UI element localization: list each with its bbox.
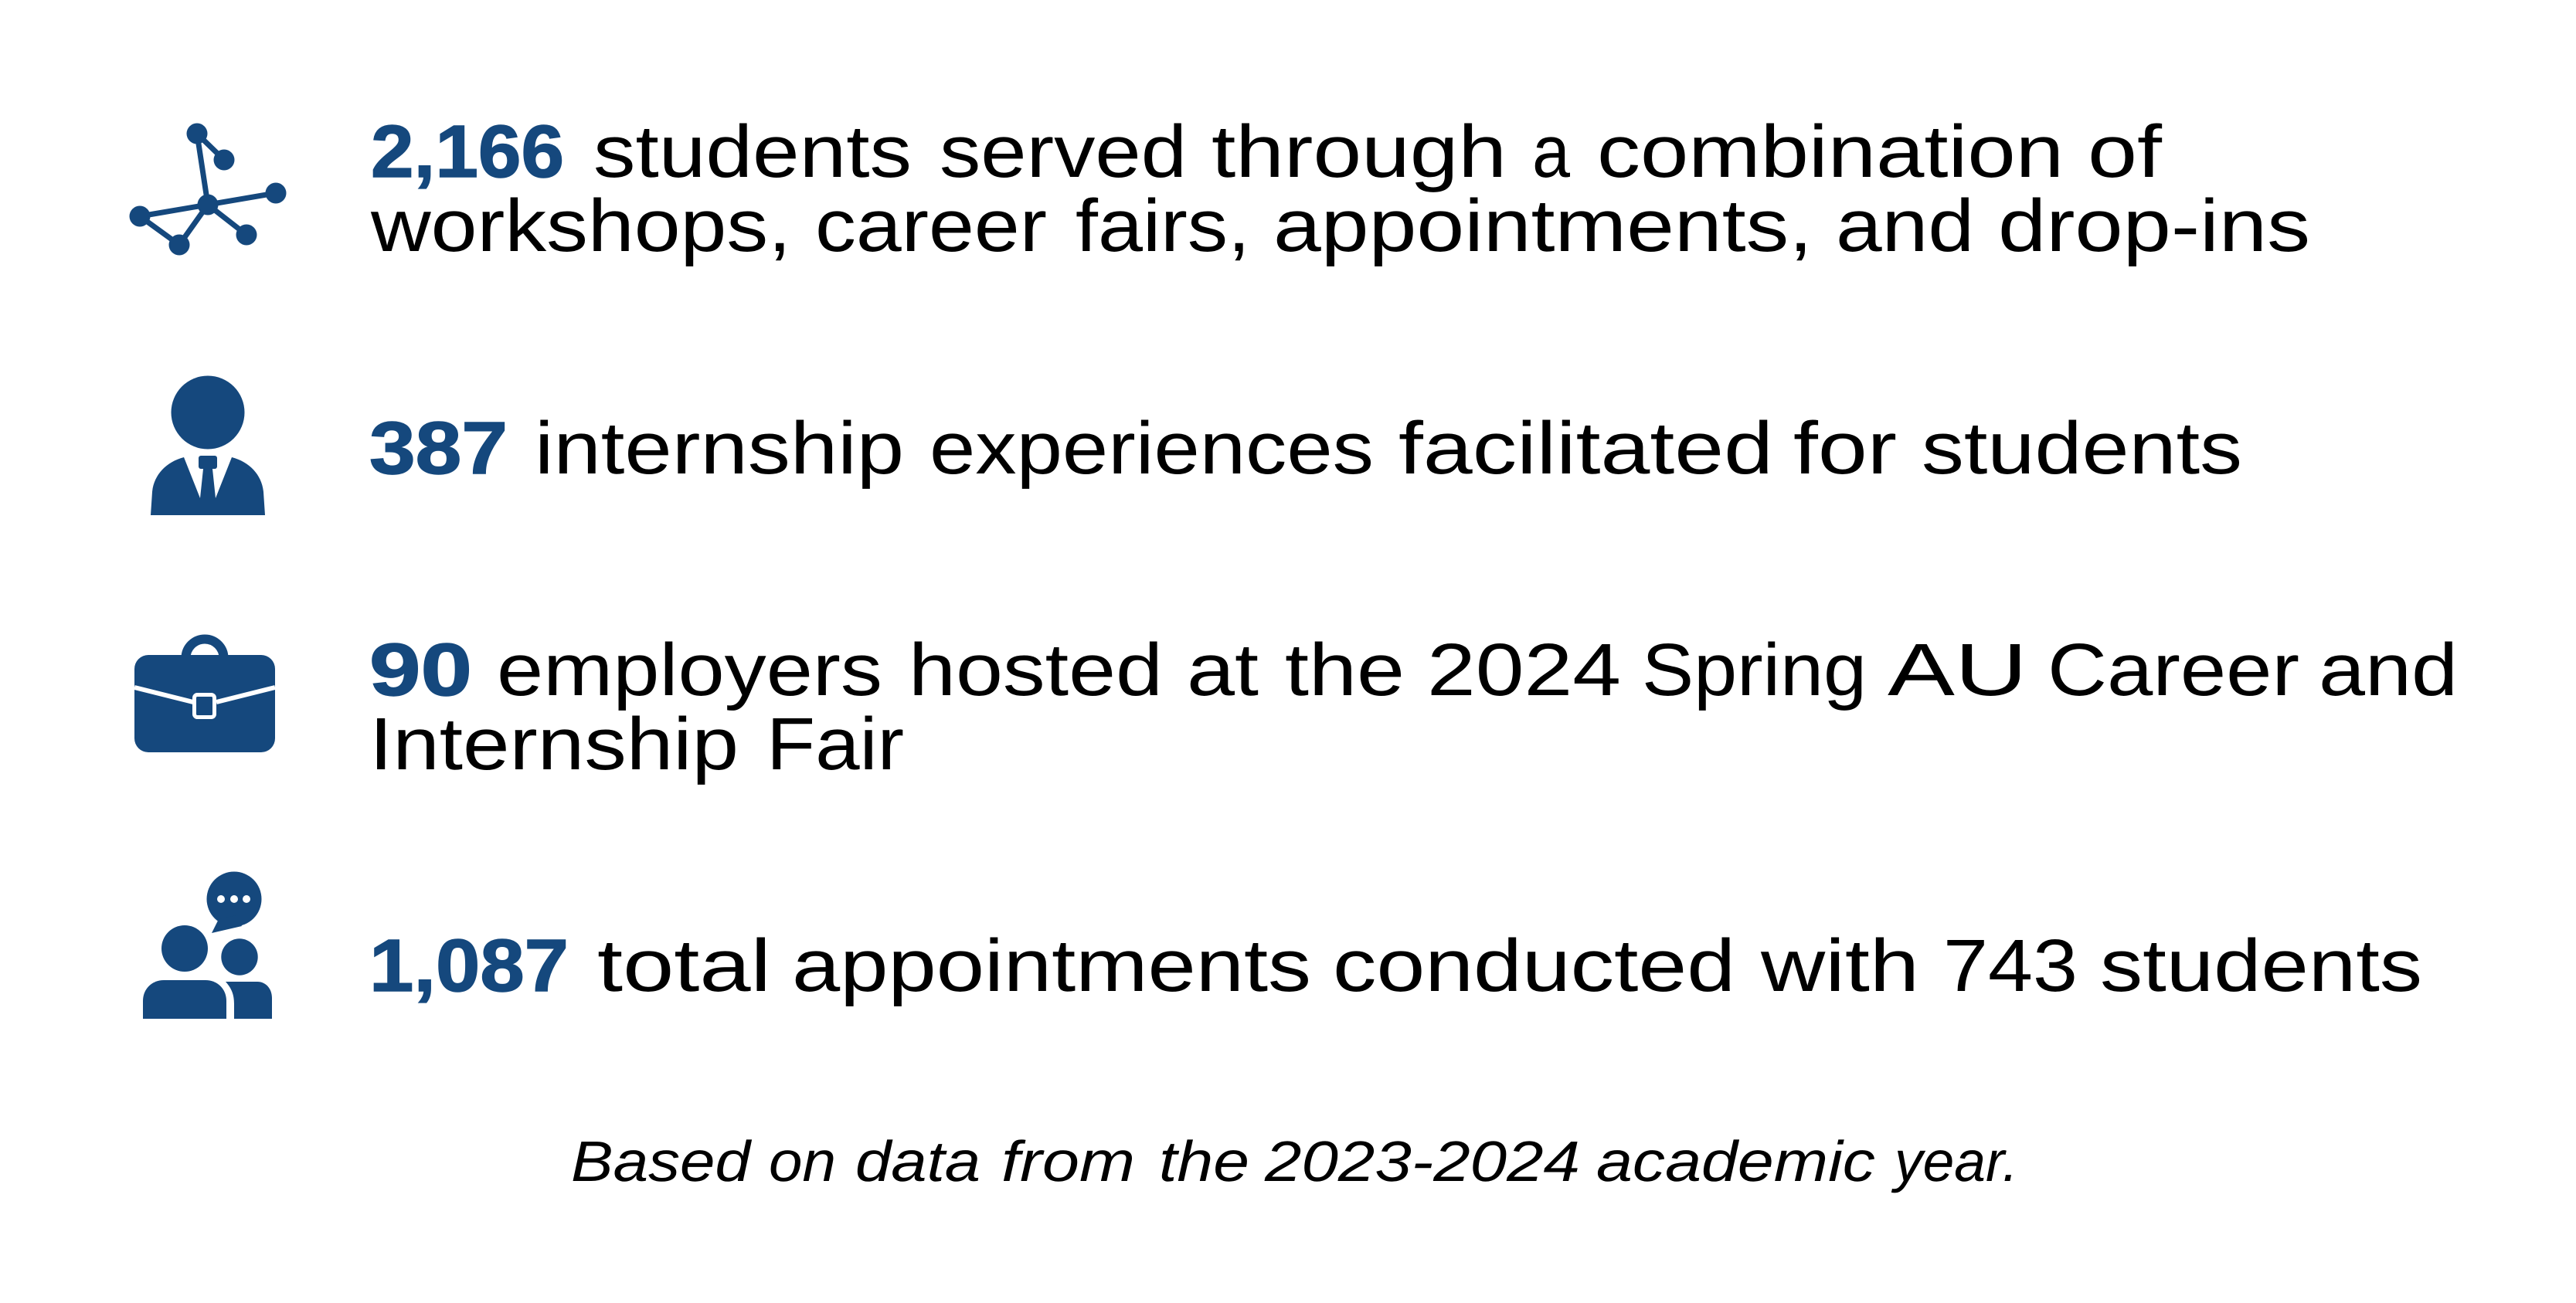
footnote: 2023-2024: [1264, 1129, 1580, 1193]
text: employers line 2: Internship: [369, 703, 739, 786]
text: total appointments: students: [2100, 925, 2422, 1007]
statistic: 2,166: 2,166: [371, 110, 564, 193]
text: employers line 2: [369, 703, 904, 786]
icon: two people with speech bubble: [143, 871, 272, 1019]
footnote: Based: [571, 1129, 753, 1193]
text: employers line 1: hosted: [909, 629, 1163, 711]
icon: network nodes: [130, 124, 286, 255]
text: internship experiences: students: [1922, 407, 2242, 490]
text: internship experiences: facilitated: [1398, 407, 1773, 490]
footnote: on: [769, 1129, 836, 1193]
row: students served: [130, 110, 2310, 267]
text: employers line 1: employers: [497, 629, 882, 711]
text: employers line 1: AU: [1888, 629, 2027, 711]
text: employers line 1: [497, 629, 2458, 711]
footnote: academic: [1596, 1129, 1875, 1193]
text: students served line 2: drop-ins: [1998, 185, 2310, 267]
text: employers line 2: Fair: [766, 703, 904, 786]
statistic: 90: 90: [369, 629, 472, 711]
icon: briefcase: [134, 639, 275, 752]
text: total appointments: total: [597, 925, 771, 1007]
text: total appointments: appointments: [792, 925, 1311, 1007]
text: students served line 1: combination: [1597, 110, 2064, 193]
row: internships: [151, 375, 2242, 515]
text: employers line 1: the: [1285, 629, 1405, 711]
text: total appointments: conducted: [1333, 925, 1735, 1007]
text: employers line 1: and: [2319, 629, 2458, 711]
row: appointments: [143, 871, 2422, 1019]
text: students served line 1: through: [1212, 110, 1507, 193]
text: students served line 1: a: [1532, 110, 1571, 193]
text: students served line 2: fairs,: [1076, 185, 1250, 267]
text: employers line 1: 2024: [1427, 629, 1621, 711]
row: employers: [134, 629, 2458, 786]
text: total appointments: [597, 925, 2422, 1007]
text: students served line 2: career: [815, 185, 1047, 267]
text: students served line 1: of: [2088, 110, 2162, 193]
footnote: from: [1001, 1129, 1135, 1193]
text: employers line 1: Career: [2048, 629, 2299, 711]
footnote: data: [855, 1129, 980, 1193]
footnote: the: [1159, 1129, 1249, 1193]
footnote: [571, 1129, 2018, 1193]
text: employers line 1: Spring: [1642, 629, 1867, 711]
text: students served line 2: appointments,: [1273, 185, 1813, 267]
text: students served line 1: [593, 110, 2162, 193]
text: students served line 1: served: [940, 110, 1187, 193]
text: internship experiences: [535, 407, 2242, 490]
footnote: year.: [1891, 1129, 2018, 1193]
text: students served line 1: students: [593, 110, 912, 193]
statistic: 1,087: 1,087: [369, 925, 569, 1007]
text: internship experiences: internship: [535, 407, 904, 490]
statistic: 387: 387: [369, 407, 508, 490]
text: students served line 2: [370, 185, 2310, 267]
icon: person with tie: [151, 375, 265, 515]
text: employers line 1: at: [1187, 629, 1259, 711]
text: total appointments: 743: [1943, 925, 2078, 1007]
text: students served line 2: workshops,: [370, 185, 791, 267]
text: internship experiences: for: [1793, 407, 1897, 490]
text: internship experiences: experiences: [929, 407, 1374, 490]
text: total appointments: with: [1760, 925, 1919, 1007]
text: students served line 2: and: [1836, 185, 1974, 267]
